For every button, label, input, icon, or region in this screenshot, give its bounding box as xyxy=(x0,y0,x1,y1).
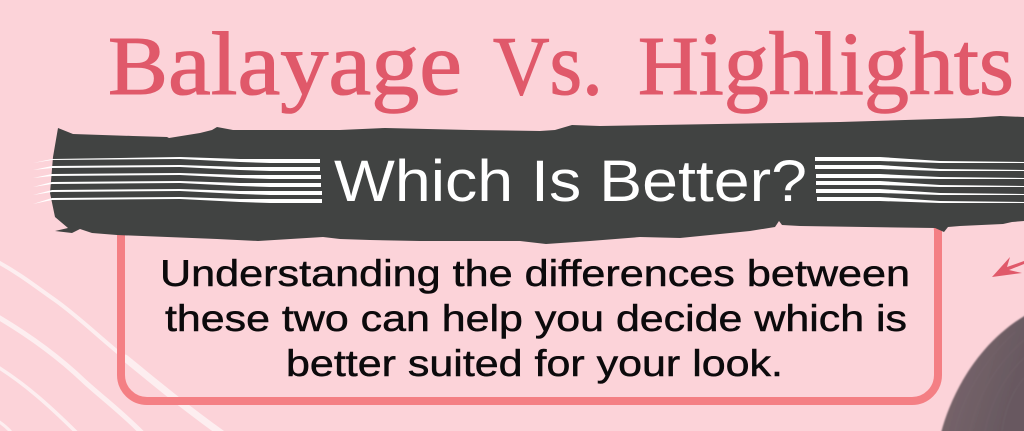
body text xyxy=(160,253,910,384)
body text: these two can help you decide which is xyxy=(165,298,907,339)
brush banner xyxy=(33,116,1024,244)
title: Vs. xyxy=(493,15,603,114)
right brush lines xyxy=(815,157,1024,203)
decorative white curves, lower left xyxy=(0,262,225,431)
left brush lines xyxy=(33,157,322,204)
title: Balayage xyxy=(108,15,462,114)
title: Highlights xyxy=(638,15,1014,114)
body text: Understanding the differences between xyxy=(160,253,910,294)
body text: better suited for your look. xyxy=(286,343,783,384)
hair photo fragment xyxy=(941,315,1024,431)
text panel outline xyxy=(121,205,938,401)
title xyxy=(108,15,1014,114)
subtitle: Which Is Better? xyxy=(334,149,807,214)
arrow xyxy=(992,257,1024,277)
